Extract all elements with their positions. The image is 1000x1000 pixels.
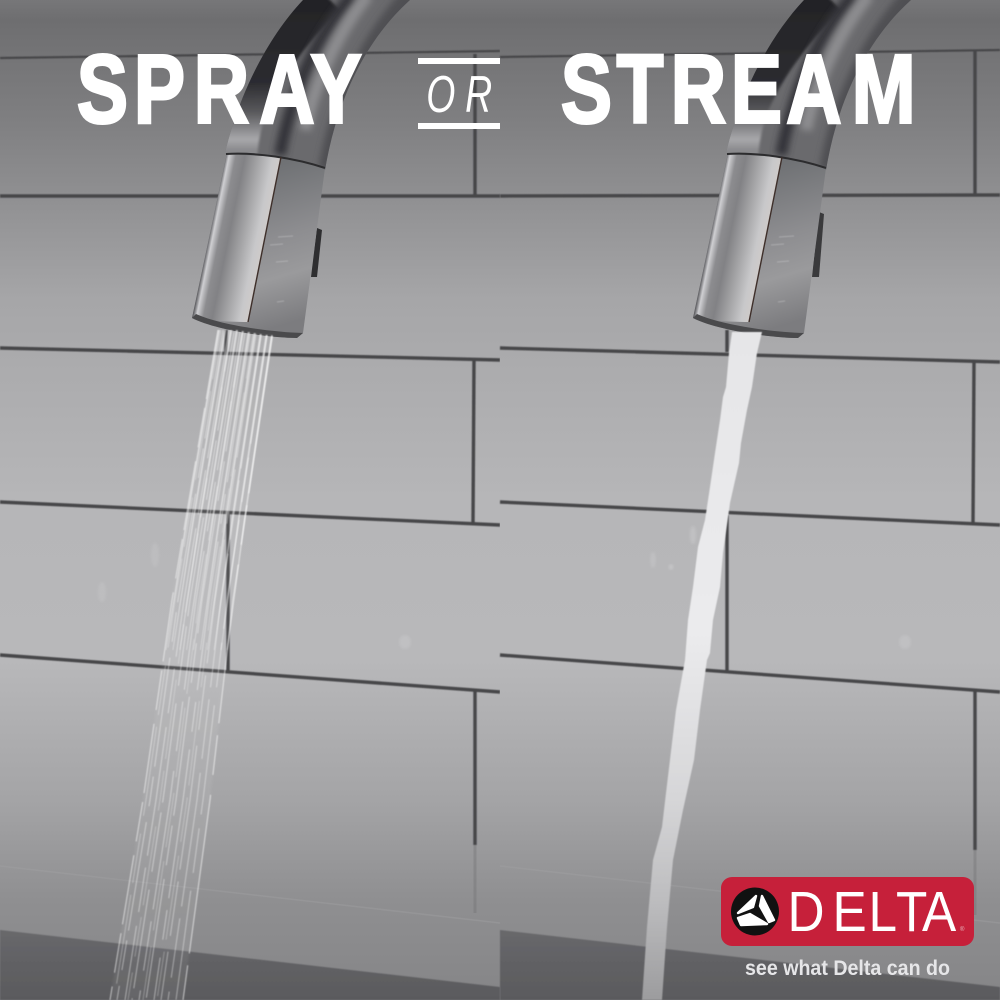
title: SPRAY: SPRAY [77,35,362,144]
registered mark: ® [960,926,965,933]
water: stream [642,332,762,1000]
faucet head cylinder [693,154,782,322]
water: spray [110,330,273,1000]
background: tiled wall, right panel [500,0,1000,1000]
faucet head [693,153,826,338]
faucet neck [727,0,911,170]
divider: OR with rules [418,58,500,129]
faucet scratches [771,236,794,302]
faucet divider [248,157,281,322]
faucet button [311,228,322,277]
faucet: stream side [693,0,916,338]
icon: Delta triangle mark [731,888,779,936]
faucet divider [749,157,782,322]
title: STREAM: STREAM [561,35,916,144]
faucet head seam [727,154,826,168]
faucet neck [226,0,410,170]
faucet button [812,212,824,277]
faucet: spray side [192,0,415,338]
faucet scratches [270,236,293,302]
logo: Delta badge [721,877,974,946]
faucet head [192,153,325,338]
aerator [693,314,804,338]
tagline: see what Delta can do [745,957,950,980]
logo wordmark: DELTA [788,881,957,944]
background: tiled wall, left panel [0,0,500,1000]
faucet head cylinder [192,154,281,322]
aerator [192,314,303,338]
divider: OR with rules: OR [426,65,492,123]
faucet head seam [226,154,325,168]
